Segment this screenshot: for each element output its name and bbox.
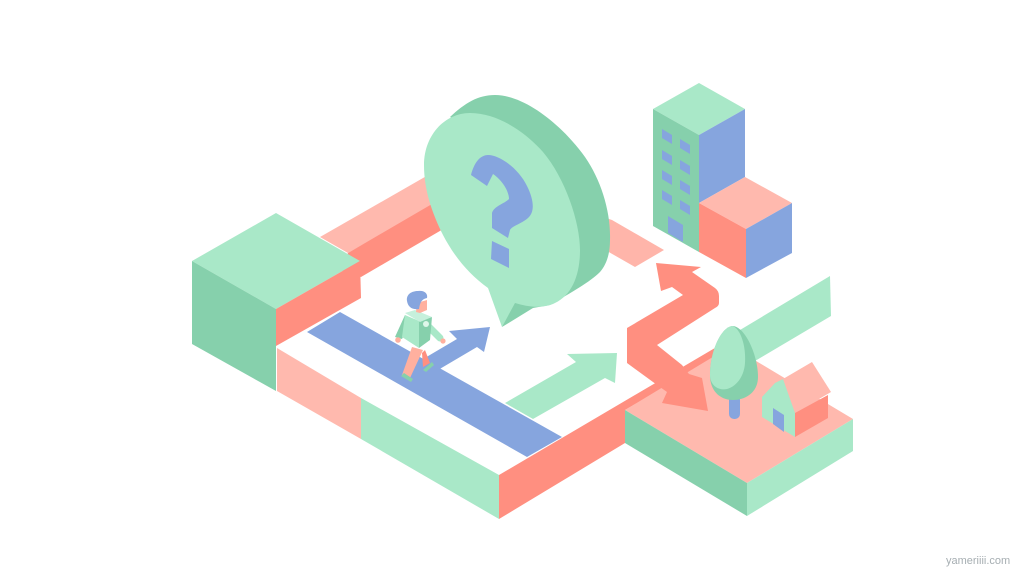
- trunk: [729, 395, 740, 419]
- front leg: [402, 347, 423, 378]
- near arm: [395, 315, 410, 339]
- door: [773, 408, 784, 432]
- front shoe: [401, 373, 413, 382]
- front left wall: [277, 348, 499, 519]
- back shoe: [423, 362, 434, 372]
- tower building: [653, 83, 745, 252]
- small cube building: [699, 177, 792, 278]
- left cube: [192, 213, 361, 391]
- island platform: [625, 346, 853, 516]
- face: [416, 300, 427, 313]
- far hand: [440, 338, 446, 344]
- bubble depth: [450, 95, 610, 327]
- question mark: [471, 155, 533, 268]
- side wall: [795, 395, 828, 437]
- torso side: [419, 317, 432, 348]
- winding salmon arrow: [627, 263, 719, 411]
- bubble face: [424, 113, 580, 327]
- shoulder highlight: [423, 321, 429, 327]
- crown shadow: [710, 326, 758, 400]
- door: [668, 216, 683, 242]
- blue path: [307, 312, 562, 457]
- collar: [405, 310, 432, 322]
- green arrow: [505, 353, 617, 419]
- roof: [783, 362, 831, 413]
- person walking: [395, 291, 446, 382]
- hair: [407, 291, 427, 309]
- pink floor tile behind bubble: [600, 216, 664, 267]
- gable front: [762, 379, 795, 437]
- back leg: [422, 350, 430, 367]
- front right salmon wall: [499, 345, 731, 519]
- crown light: [710, 326, 745, 389]
- blue arrow: [418, 327, 490, 370]
- back wall beam: [320, 174, 445, 277]
- house: [762, 362, 831, 437]
- windows: [662, 129, 690, 215]
- torso front: [402, 315, 419, 348]
- rear green strip: [740, 276, 831, 361]
- watermark: yameriiii.com: [946, 555, 1010, 567]
- tree: [710, 326, 758, 419]
- far arm: [426, 324, 440, 338]
- speech bubble with question mark: [424, 95, 610, 327]
- near hand: [395, 337, 401, 343]
